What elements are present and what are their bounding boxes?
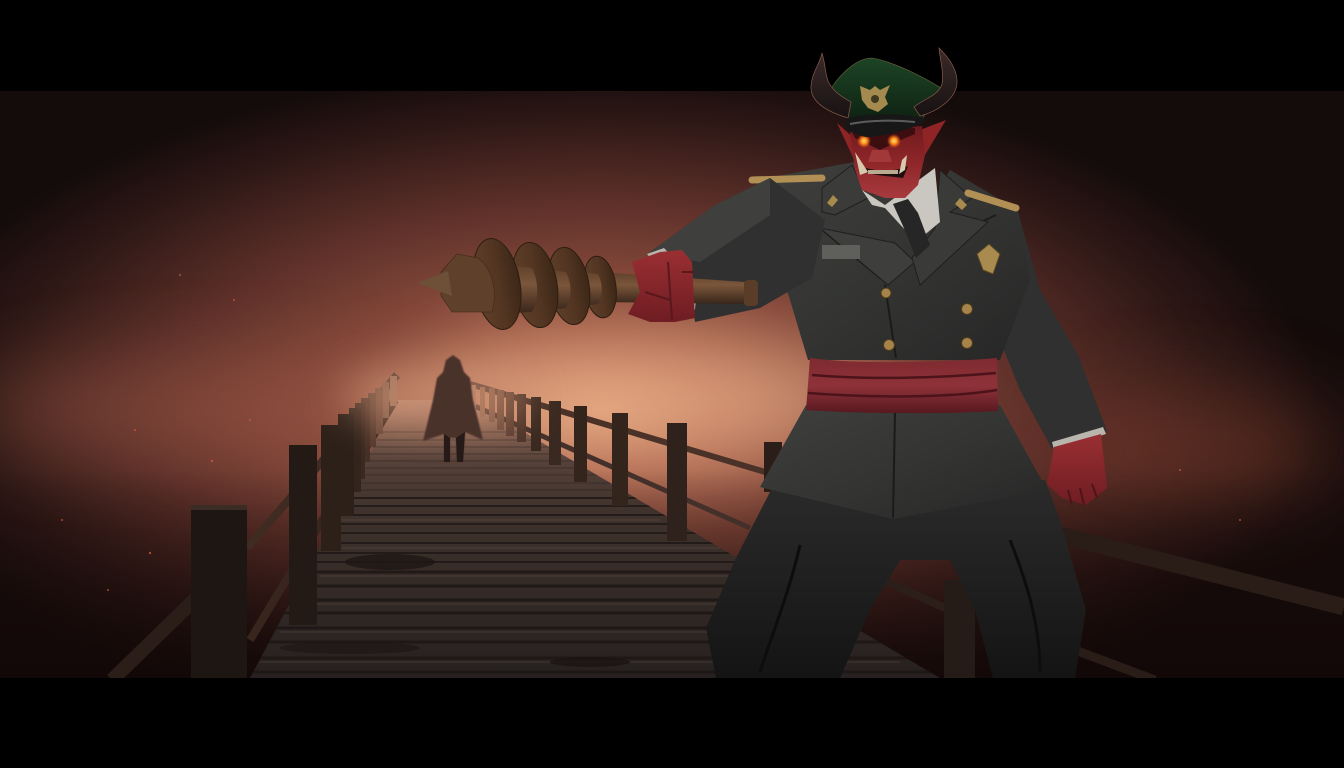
ears: [837, 120, 946, 158]
eyes: [857, 134, 901, 148]
jacket skirt: [760, 405, 1047, 519]
left railing and posts: [112, 375, 397, 680]
fog over the far end of the bridge: [340, 365, 530, 425]
neck and white collar: [862, 168, 940, 234]
face: [850, 126, 925, 198]
medal: [977, 244, 1000, 274]
right railing and posts: [470, 384, 1344, 680]
head and cap: [811, 48, 957, 258]
mouth and fangs: [855, 152, 908, 178]
buttons: [881, 288, 972, 350]
right arm (viewer): [1004, 216, 1107, 449]
epaulettes: [752, 178, 1016, 208]
cap badge: [860, 85, 890, 112]
trousers: [706, 480, 1086, 678]
ring flange 1: [474, 238, 522, 330]
shaft segment 1: [517, 266, 538, 313]
horns: [811, 48, 957, 118]
shaft segment 3: [587, 272, 602, 306]
embers: [61, 274, 1241, 591]
sash: [806, 358, 998, 413]
ring flange 4: [585, 256, 617, 318]
club end cap: [744, 280, 758, 306]
right fist: [1047, 434, 1107, 505]
extended arm: [647, 178, 825, 322]
background: red haze sky: [0, 91, 1344, 678]
jacket torso: [755, 162, 1030, 360]
right cuff: [1052, 427, 1106, 450]
gripping hand: [628, 250, 695, 322]
ring flange 2: [514, 242, 558, 328]
bridge deck with planks: [250, 400, 950, 678]
cloaked figure walking away: [423, 355, 483, 462]
club head core: [441, 254, 494, 312]
ring flange 3: [550, 246, 590, 326]
shaft segment 2: [555, 271, 570, 309]
tie: [893, 199, 930, 258]
chest ribbon plate: [822, 245, 860, 259]
cap band and visor: [845, 114, 925, 137]
spiked club: [417, 235, 758, 333]
club shaft: [614, 273, 744, 304]
nose: [868, 150, 892, 162]
collar pins: [827, 195, 838, 207]
brow and shadow: [850, 128, 915, 150]
peaked cap crown: [832, 58, 941, 118]
spike: [417, 271, 452, 296]
demon body: [647, 162, 1107, 678]
